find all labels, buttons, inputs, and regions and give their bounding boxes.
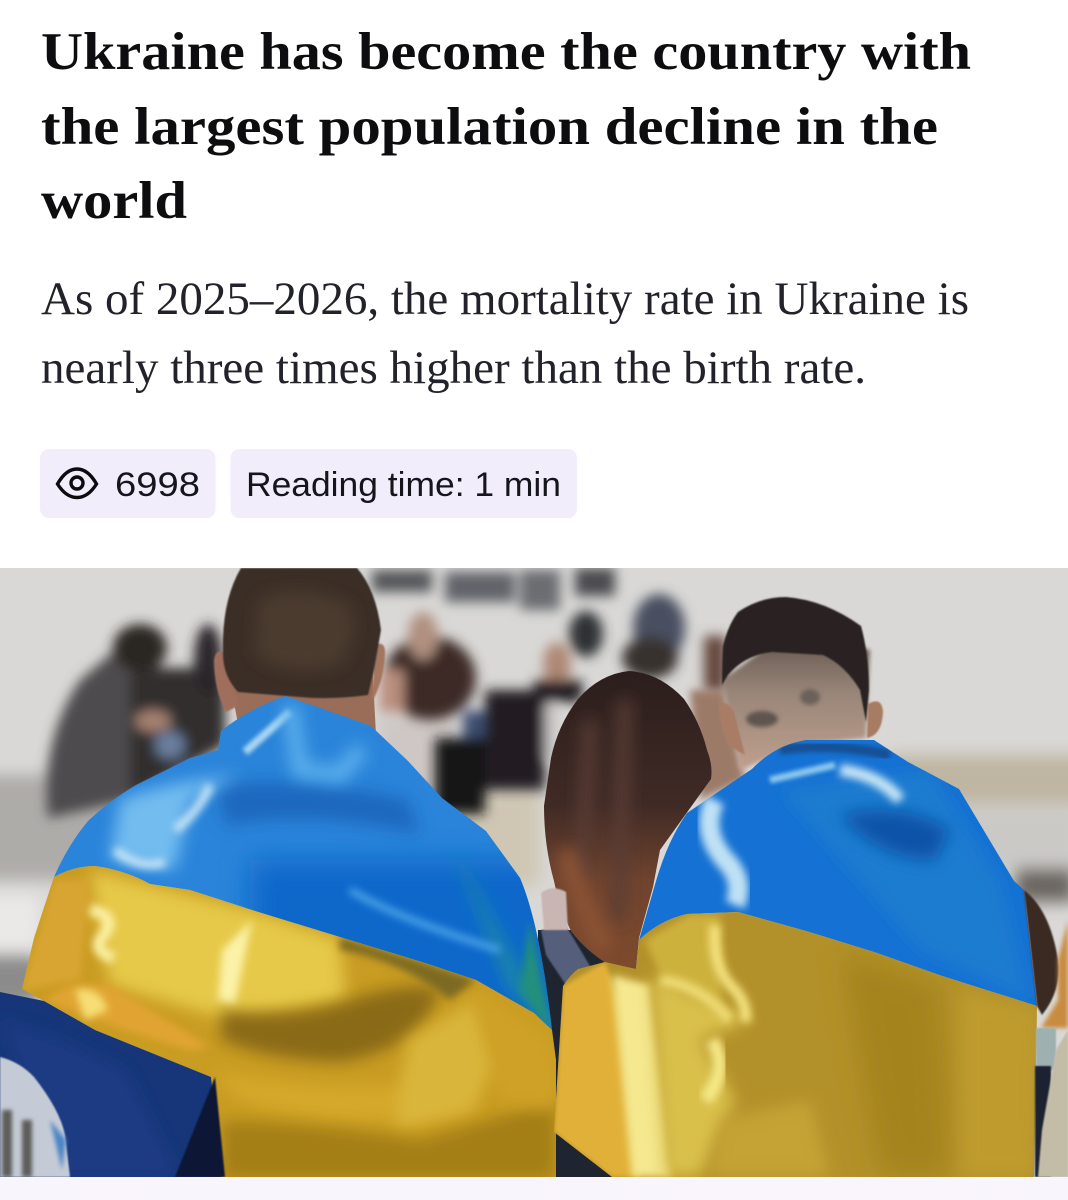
photo: people wrapped in Ukrainian flags <box>0 568 1068 1180</box>
title <box>41 23 971 230</box>
title: Ukraine has become the country with <box>41 23 971 81</box>
right flag: blue <box>639 740 1037 1006</box>
subtitle text <box>41 273 969 394</box>
person between: long brown hair <box>540 670 715 970</box>
far right: edge figures <box>1024 890 1068 1177</box>
blurred crowd background <box>0 568 1068 1005</box>
left flag: gold <box>10 860 570 1180</box>
icon: eye <box>58 469 96 498</box>
badge: reading time: Reading time: 1 min <box>246 466 561 504</box>
dark gap behind the arm <box>538 930 618 1177</box>
person left: head and neck <box>214 568 385 735</box>
subtitle text: nearly three times higher than the birth rate. <box>41 342 866 394</box>
woman's arm and hand <box>541 888 590 985</box>
person front left: navy jacket <box>0 992 225 1177</box>
person right: head and neck <box>719 597 883 770</box>
subtitle text: As of 2025–2026, the mortality rate in Ukraine is <box>41 273 969 325</box>
badge: view count <box>40 449 216 518</box>
badge: view count: 6998 <box>115 466 200 504</box>
neck skin behind the right man's ear <box>690 690 745 800</box>
footer strip <box>0 1177 1068 1200</box>
right flag: gold <box>550 900 1045 1180</box>
person front left: patterned shirt <box>0 1057 70 1177</box>
title: world <box>41 172 187 230</box>
title: the largest population decline in the <box>41 98 938 156</box>
badge: reading time <box>230 449 577 518</box>
left flag: blue <box>40 690 560 1040</box>
